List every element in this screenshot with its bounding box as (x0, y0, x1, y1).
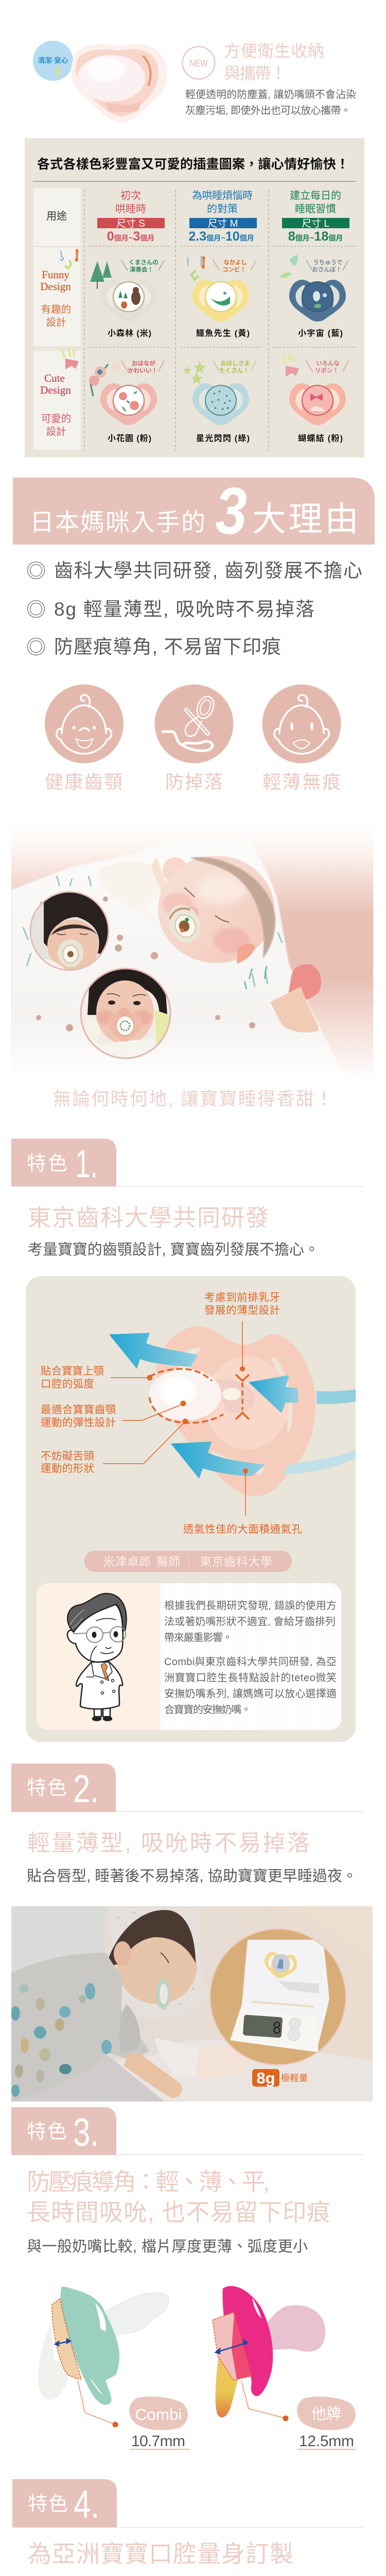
card: doctor quote (37, 1583, 341, 1730)
product: little garden (89, 360, 164, 443)
inset: scale (208, 1928, 347, 2067)
text: doctor statement: Combi與東京齒科大學共同研發, 為亞 (164, 1656, 337, 1668)
icon: NEW badge (182, 46, 215, 79)
product: little universe: おさんぽ！ (312, 266, 342, 273)
list: three reasons: 齒科大學共同研發, 齒列發展不擔心 (54, 560, 362, 581)
product: other brand side view (213, 2286, 325, 2421)
labels: icon captions (45, 771, 341, 792)
arrows: airflow (109, 1333, 356, 1479)
labels: icon captions: 防掉落 (165, 771, 223, 792)
product: little garden: かわいい！ (128, 367, 157, 374)
column: size S: 哄睡時 (115, 203, 146, 215)
text: feature 2 description: 貼合唇型, 睡著後不易掉落, 協助寶寶更早睡過夜。 (27, 1868, 357, 1885)
callout: palate fit: 貼合寶寶上顎 (41, 1365, 104, 1377)
tab: feature 1: 1. (75, 1142, 98, 1186)
column: size M: 2.3個月~10個月 (188, 229, 254, 244)
column: size L: 睡眠習慣 (295, 203, 336, 215)
heading: feature 3: 長時間吸吮, 也不易留下印痕 (27, 2199, 330, 2226)
row label: funny design: 有趣的 (41, 304, 71, 315)
illustration: doctor (67, 1594, 126, 1721)
label: other brand 12.5mm: 他牌 (311, 2405, 341, 2422)
row label: cute design: Design (40, 384, 71, 396)
row label: funny design: Design (40, 280, 71, 293)
text: doctor statement: 帶來嚴重影響。 (164, 1632, 233, 1643)
text: storage description (185, 89, 356, 116)
heading: storage: 方便衛生收納 (224, 42, 324, 60)
pill: doctor name (84, 1551, 292, 1572)
callout: thin front: 發展的薄型設計 (204, 1304, 280, 1316)
product: mr crocodile: コンビ！ (222, 266, 246, 273)
product: little garden: 小花園 (粉) (108, 433, 151, 443)
inset: first baby (28, 889, 111, 974)
list: three reasons: 8g 輕量薄型, 吸吮時不易掉落 (54, 599, 314, 620)
column: size S: 0個月~3個月 (107, 229, 154, 244)
product: twinkling stars: 星光閃閃 (綠) (196, 433, 250, 443)
callout: flexible design: 最適合寶寶齒顎 (41, 1404, 116, 1416)
product: little universe (279, 255, 348, 338)
caption: sleep anywhere: 無論何時何地, 讓寶寶睡得香甜！ (53, 1089, 333, 1109)
heading: feature 4: 為亞洲寶寶口腔量身訂製 (28, 2540, 293, 2567)
banner: 3 big reasons (13, 474, 375, 548)
icon: NEW badge: NEW (189, 58, 208, 69)
banner: 3 big reasons: 日本媽咪入手的 (30, 509, 205, 536)
labels: icon captions: 健康齒顎 (45, 771, 122, 792)
callout: vent holes (183, 1468, 302, 1535)
heading: feature 1: 東京齒科大學共同研發 (28, 1205, 269, 1231)
panel: hygienic storage cover (33, 41, 356, 123)
text: feature 1 description: 考量寶寶的齒顎設計, 寶寶齒列發展不擔心。 (28, 1241, 319, 1258)
product: mr crocodile: なかよし (223, 259, 247, 266)
tab: feature 4: 特色 (28, 2494, 68, 2515)
product: bow tie: 蝴蝶結 (粉) (298, 433, 343, 443)
row label: cute design: Cute (44, 372, 65, 384)
callout: palate fit: 口腔的弧度 (41, 1378, 94, 1390)
label: other brand 12.5mm (297, 2397, 356, 2450)
tab: feature 4 (12, 2479, 364, 2528)
baby head (117, 1937, 197, 2004)
icon: clean badge (33, 41, 73, 81)
icon: clean badge: 清潔·安心 (38, 56, 68, 64)
product: Combi pacifier side view (38, 2286, 169, 2428)
product: bow tie: リボン！ (315, 367, 339, 374)
label: other brand 12.5mm: 12.5mm (299, 2433, 354, 2450)
tab: feature 3: 3. (73, 2111, 99, 2155)
pill: doctor name: 米津卓郎 (103, 1555, 151, 1568)
callout: vent holes: 透氣性佳的大面積通氣孔 (183, 1523, 302, 1535)
column: size S: 尺寸 S (116, 218, 145, 229)
icon: anti-drop (154, 684, 234, 764)
column: size S (97, 190, 165, 244)
product: little garden: おはなが (132, 360, 155, 367)
inset: second baby (80, 966, 171, 1064)
heading: feature 3 (27, 2168, 330, 2226)
pajama body (11, 1953, 149, 2061)
tab: feature 2: 2. (73, 1767, 99, 1811)
product: little forest: 演奏会！ (130, 266, 153, 273)
main baby (158, 856, 274, 963)
small leaves (244, 966, 267, 989)
column: size L: 8個月~18個月 (288, 229, 343, 244)
diagram: dashed nipple outline (149, 1369, 249, 1423)
product: mr crocodile (188, 256, 256, 338)
callout: tongue shape (41, 1419, 188, 1475)
row label: cute design: 設計 (46, 426, 66, 437)
icon: pacifier with clear cover (71, 44, 167, 123)
text: doctor statement: 安撫奶嘴系列, 讓媽媽可以放心選擇適 (164, 1688, 337, 1700)
label: Combi 10.7mm (129, 2397, 190, 2450)
photo: sleeping baby and scale (11, 1906, 373, 2102)
tab: feature 1: 特色 (27, 1153, 67, 1175)
row label: funny design: Funny (42, 268, 69, 281)
badge: 8g: 8g (256, 2069, 275, 2087)
icon: thin no marks (262, 684, 341, 764)
label: Combi 10.7mm: 10.7mm (131, 2433, 185, 2450)
heading: storage: 與攜帶！ (224, 64, 287, 82)
product: bow tie (281, 353, 348, 443)
tab: feature 4: 4. (74, 2483, 99, 2527)
column: size M: 尺寸 M (207, 218, 238, 229)
product: little forest: 小森林 (米) (108, 328, 151, 338)
row label: funny design: 設計 (46, 317, 66, 328)
product: little universe: 小宇宙 (藍) (298, 328, 343, 338)
badge: 8g: 極輕量 (281, 2073, 308, 2083)
product: twinkling stars (183, 360, 256, 443)
blanket (11, 838, 346, 1080)
column: size M (188, 190, 257, 244)
product: little forest: くまさんの (129, 259, 159, 266)
column: size M: 為哄睡煩惱時 (192, 190, 253, 201)
label: Combi 10.7mm: Combi (135, 2405, 182, 2424)
arrow: other brand thickness (216, 2340, 248, 2353)
callout: tongue shape: 不妨礙舌頭 (41, 1450, 95, 1462)
product: mr crocodile: 鱷魚先生 (黃) (196, 328, 250, 338)
callout: tongue shape: 運動的形狀 (41, 1463, 94, 1475)
badge: 8g (252, 2069, 308, 2087)
text: storage description: 灰塵污垢, 即使外出也可以放心攜帶。 (185, 105, 351, 116)
list: three reasons: 防壓痕導角, 不易留下印痕 (54, 636, 281, 657)
callout: thin front: 考慮到前排乳牙 (204, 1292, 280, 1303)
tab: feature 2 (11, 1764, 363, 1812)
heading: storage (224, 42, 324, 82)
panel: dental design diagram (26, 1276, 356, 1742)
tab: feature 2: 特色 (27, 1777, 67, 1799)
tab: feature 3: 特色 (27, 2121, 67, 2143)
row label: cute design (40, 347, 79, 437)
tab: feature 1 (11, 1139, 363, 1187)
banner: 3 big reasons: 大理由 (252, 500, 359, 538)
product: little forest (90, 259, 164, 338)
callout: thin front (204, 1292, 280, 1371)
product: bow tie: いろんな (316, 360, 340, 367)
photo: sleeping babies collage (11, 824, 373, 1080)
text: doctor statement (164, 1600, 337, 1716)
text: doctor statement: 合寶寶的安撫奶嘴。 (164, 1704, 251, 1716)
text: storage description: 輕便透明的防塵蓋, 讓奶嘴頭不會沾染 (185, 89, 356, 100)
column: size M: 的對策 (207, 203, 238, 215)
product: twinkling stars: たくさん！ (219, 367, 249, 374)
sleeve (98, 861, 165, 917)
product: little universe: うちゅうで (313, 259, 343, 266)
column: size L: 尺寸 L (302, 218, 329, 229)
callout: flexible design (41, 1400, 186, 1429)
text: doctor statement: 根據我們長期研究發現, 錯誤的使用方 (164, 1600, 337, 1612)
heading: table title: 各式各樣色彩豐富又可愛的插畫圖案，讓心情好愉快！ (37, 157, 349, 172)
banner: 3 big reasons: 3 (215, 474, 247, 548)
heading: feature 2: 輕量薄型, 吸吮時不易掉落 (27, 1831, 310, 1856)
list: three reasons (28, 560, 362, 657)
bed sheet (115, 2040, 373, 2102)
pill: doctor name: 東京齒科大學 (200, 1555, 272, 1568)
callout: palate fit (41, 1365, 152, 1390)
arm and hand (124, 2053, 182, 2098)
row label: cute design: 可愛的 (41, 413, 71, 425)
callout: flexible design: 運動的彈性設計 (41, 1417, 116, 1429)
text: doctor statement: 法或著奶嘴形狀不適宜, 會給牙齒排列 (164, 1616, 336, 1628)
column: size L (282, 190, 349, 244)
column: size L: 建立每日的 (290, 190, 341, 201)
panel: design comparison table (25, 138, 364, 457)
text: doctor statement: 洲寶寶口腔生長特點設計的teteo微笑 (164, 1672, 337, 1684)
arrow: Combi thickness (55, 2339, 71, 2346)
tab: feature 3 (11, 2107, 363, 2155)
row label: usage: 用途 (46, 210, 67, 222)
product: twinkling stars: おほしさま (220, 360, 250, 367)
text: feature 3 description: 與一般奶嘴比較, 檔片厚度更薄、弧度更小 (27, 2238, 308, 2255)
pill: doctor name: 醫師 (156, 1555, 180, 1568)
hand lower right (288, 964, 321, 1000)
diagram: pacifier cross section (149, 1326, 315, 1496)
labels: icon captions: 輕薄無痕 (262, 771, 341, 792)
inset: scale: 8 (273, 2019, 281, 2037)
row label: funny design (40, 249, 79, 328)
icon: healthy jaw (45, 684, 124, 764)
column: size S: 初次 (120, 190, 141, 201)
heading: feature 3: 防壓痕導角：輕、薄、平, (27, 2168, 270, 2195)
